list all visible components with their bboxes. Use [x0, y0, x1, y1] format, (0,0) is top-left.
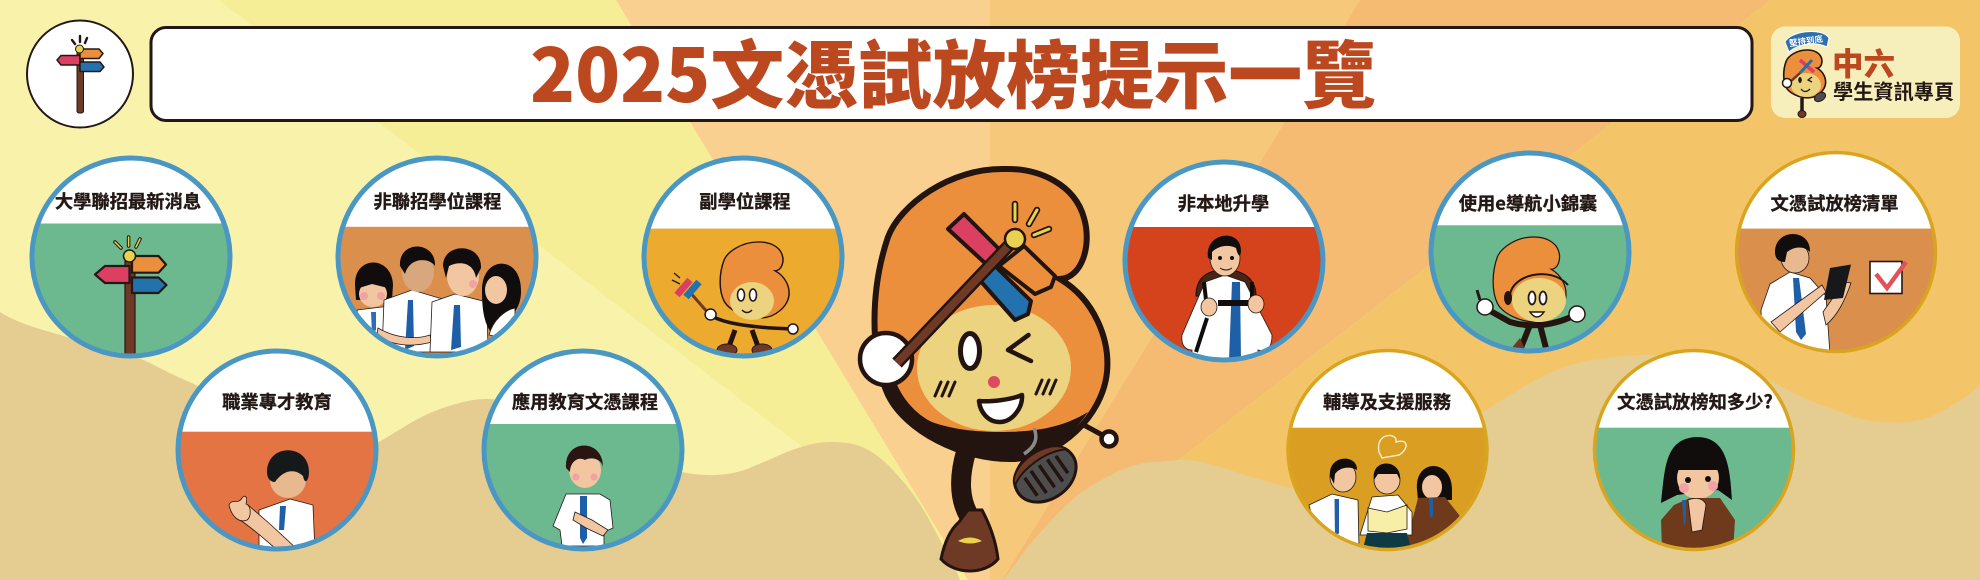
icon: signpost: [95, 237, 166, 361]
panel: 文憑試放榜知多少?: 文憑試放榜知多少?: [1617, 388, 1773, 414]
mascot raised shoe: [1004, 435, 1087, 514]
panel: 輔導及支援服務: [1280, 350, 1495, 558]
panel: 職業專才教育: 職業專才教育: [222, 388, 332, 414]
illustration: student with backpack: [1182, 236, 1272, 365]
mascot face: [935, 334, 1056, 422]
logo badge: 中六學生資訊專頁: 堅持到底: [1788, 33, 1824, 49]
panel: 文憑試放榜知多少?: [1585, 350, 1805, 558]
panel: 非本地升學: 非本地升學: [1178, 190, 1269, 216]
logo badge: 中六學生資訊專頁: 學生資訊專頁: [1833, 76, 1954, 105]
panel: 使用e導航小錦囊: 使用e導航小錦囊: [1459, 190, 1597, 216]
illustration: group of four students: [355, 246, 521, 352]
mascot body: [874, 169, 1107, 461]
mascot signpost: [897, 204, 1055, 363]
panel: 文憑試放榜清單: [1725, 152, 1945, 359]
panel: 副學位課程: 副學位課程: [699, 188, 791, 214]
panel: 輔導及支援服務: 輔導及支援服務: [1323, 388, 1451, 414]
mascot leg and shoe: [941, 452, 998, 571]
illustration: small mascot with sign: [672, 242, 798, 356]
title banner: 2025文憑試放榜提示一覽: [530, 17, 1376, 124]
logo badge: 中六學生資訊專頁: [1771, 26, 1960, 118]
mascot hand: [860, 333, 912, 385]
panel: 應用教育文憑課程: 應用教育文憑課程: [512, 388, 658, 414]
panel: 非聯招學位課程: [336, 156, 538, 358]
icon: signpost logo: [27, 20, 133, 128]
panel: 大學聯招最新消息: [20, 158, 240, 364]
panel: 非聯招學位課程: 非聯招學位課程: [374, 188, 501, 214]
illustration: student with tie: [553, 446, 613, 546]
illustration: thinking girl: [1661, 437, 1735, 552]
illustration: three students reading with heart: [1309, 435, 1463, 552]
panel: 文憑試放榜清單: 文憑試放榜清單: [1771, 190, 1898, 216]
panel: 應用教育文憑課程: [475, 351, 690, 554]
title banner: [151, 17, 1752, 124]
illustration: mascot with headset: [1477, 237, 1585, 352]
panel: 職業專才教育: [170, 351, 385, 557]
logo badge: 中六學生資訊專頁: 中六: [1832, 39, 1895, 85]
panel: 大學聯招最新消息: 大學聯招最新消息: [55, 188, 201, 214]
mascot lace: [1024, 428, 1036, 454]
mascot: central character pointing with signpost: [860, 169, 1116, 571]
illustration: student with tablet and checklist: [1761, 234, 1906, 355]
panel: 非本地升學: [1115, 162, 1335, 367]
panel: 使用e導航小錦囊: [1420, 153, 1640, 360]
mascot right arm: [1082, 424, 1116, 446]
illustration: student thumbs up: [229, 450, 315, 552]
panel: 副學位課程: [642, 156, 844, 358]
